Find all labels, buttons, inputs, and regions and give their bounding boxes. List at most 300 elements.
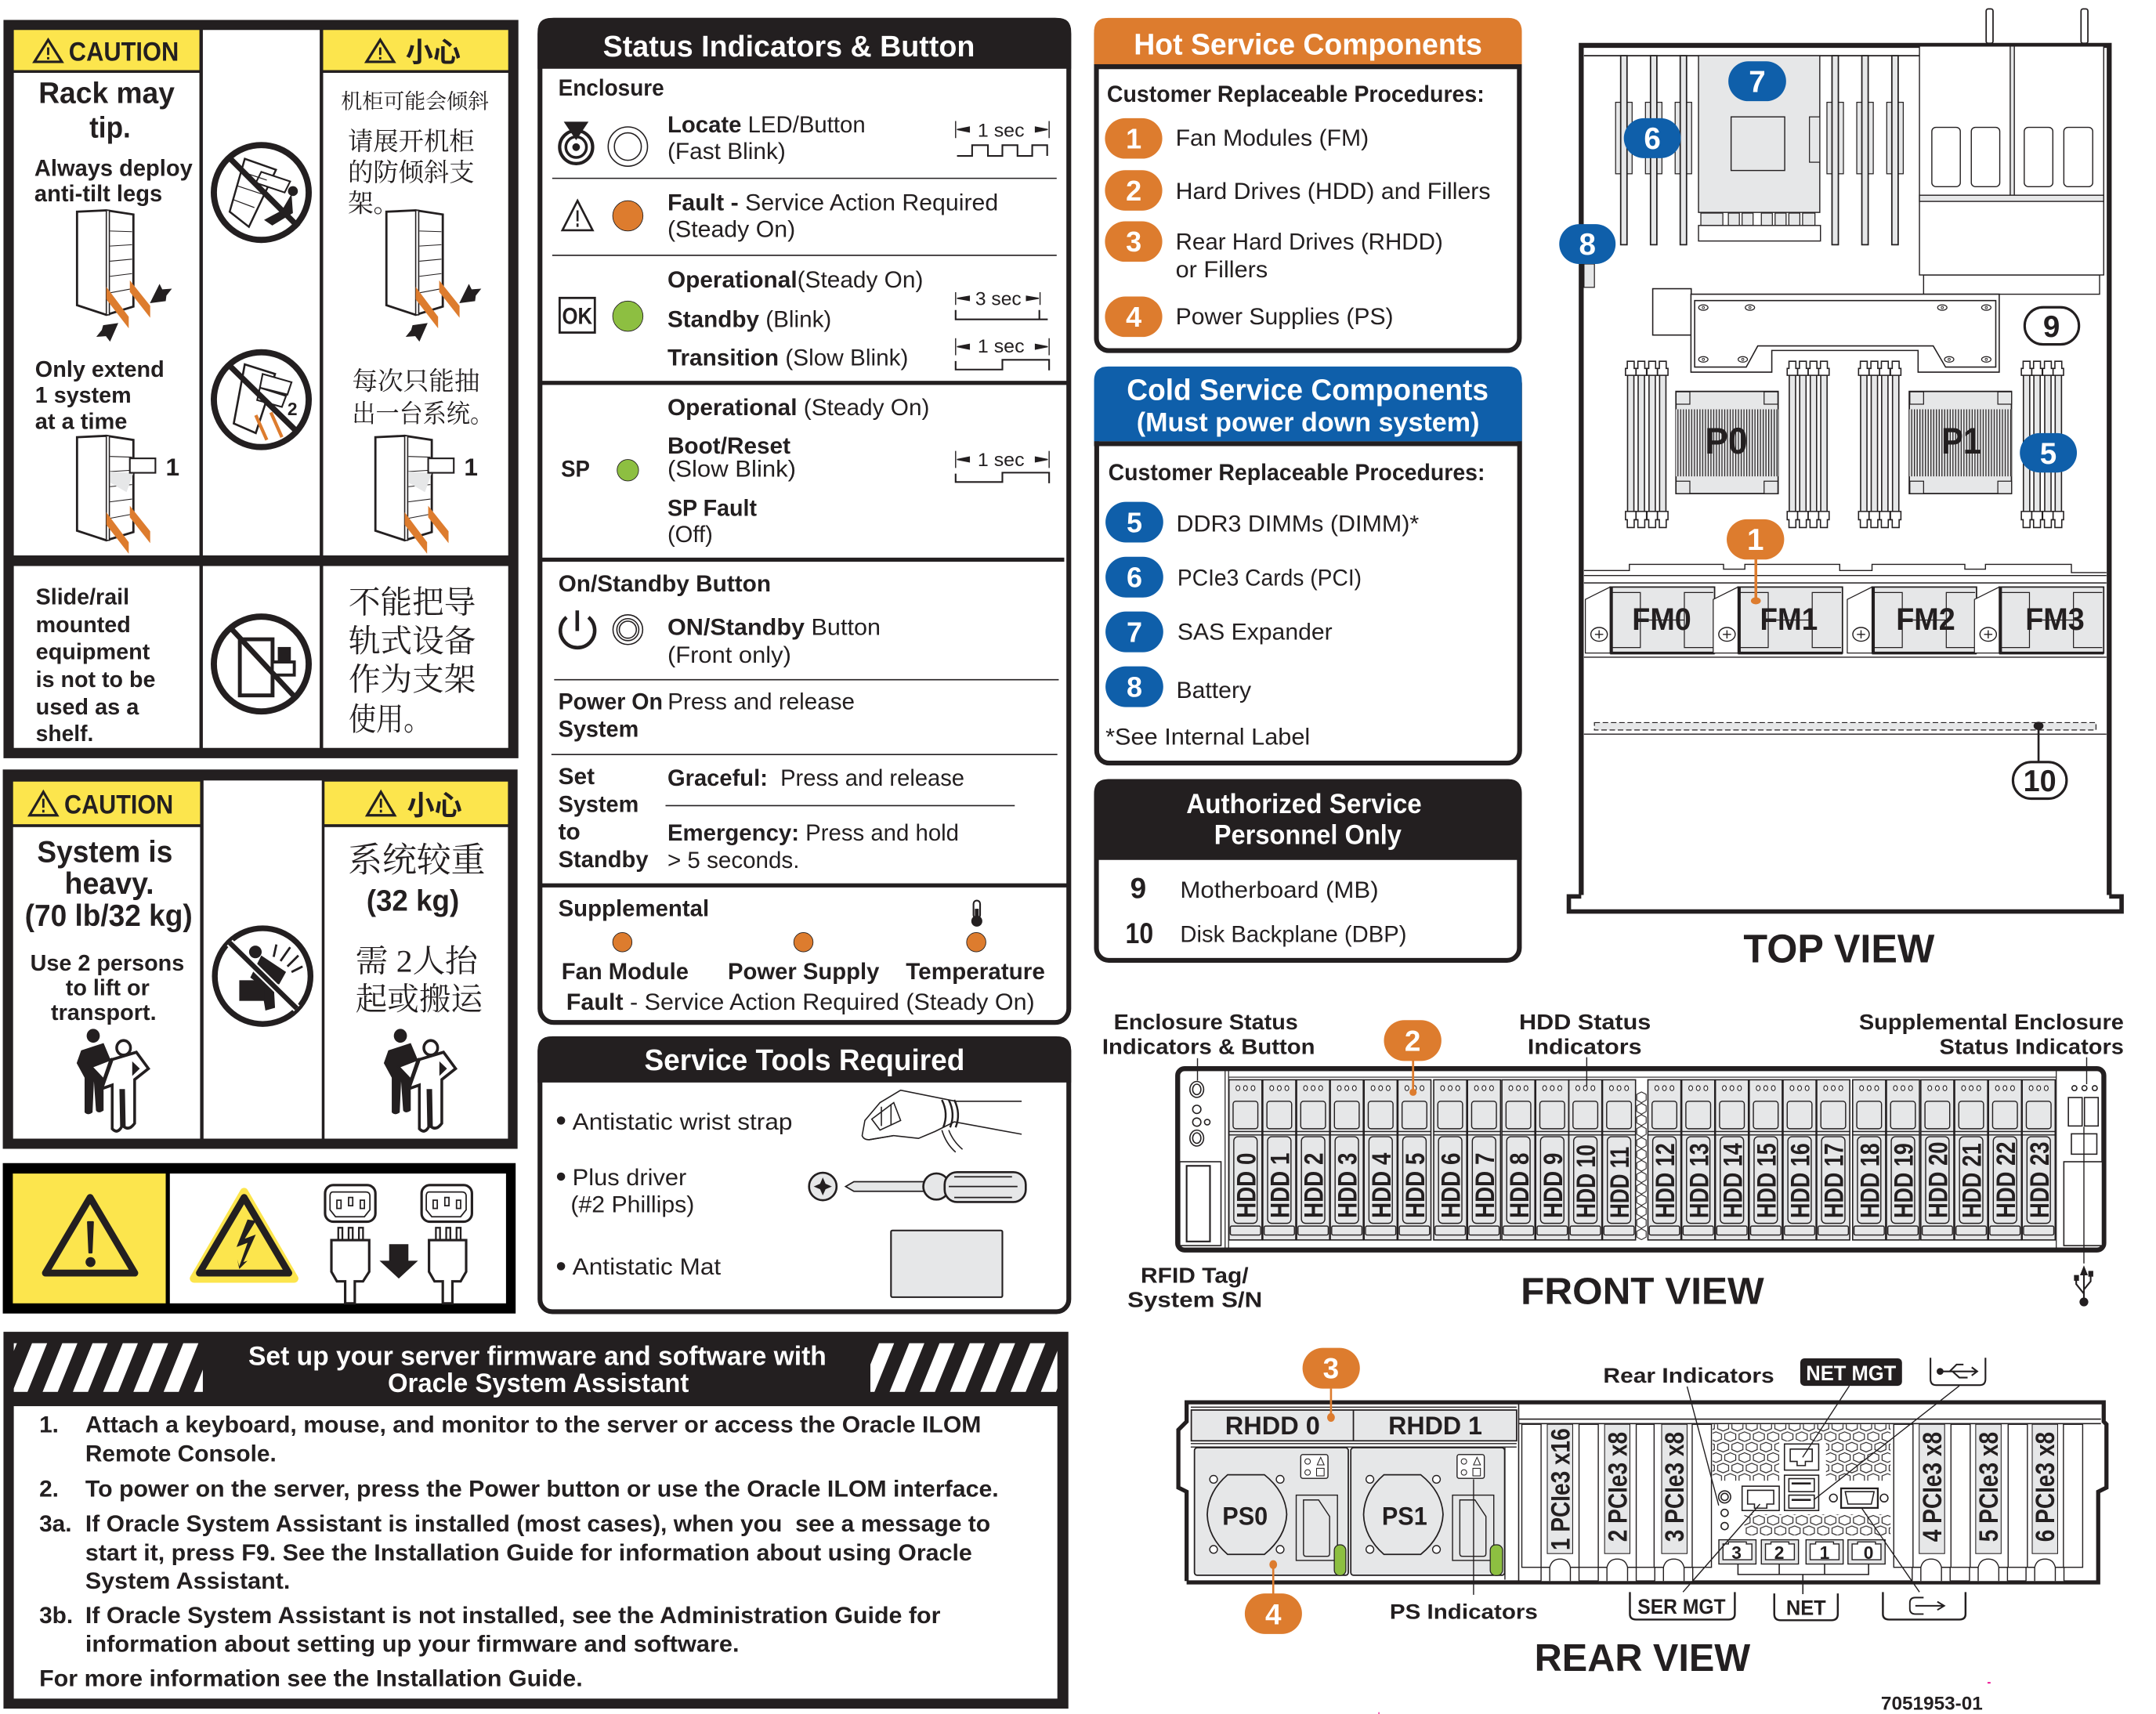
- text: system is heavy english: [25, 835, 193, 1025]
- net ports: 3: [1731, 1542, 1742, 1563]
- text: system is heavy english: System is: [37, 835, 172, 869]
- text: customer replaceable: Customer Replaceable Procedures:: [1107, 81, 1485, 107]
- icon: power sockets and plugs: [325, 1185, 472, 1304]
- heading: hot service: Hot Service Components: [1134, 27, 1482, 60]
- icon: rack with one extended system (chinese column): 1: [464, 453, 478, 481]
- heading: caution english: CAUTION: [64, 790, 173, 819]
- text: fault: Fault - Service Action Required: [667, 190, 998, 216]
- pcie slots: [1522, 1424, 2082, 1581]
- callout 1: [1727, 519, 1784, 605]
- badge: net mgt: NET MGT: [1806, 1361, 1897, 1385]
- text: system is heavy english: heavy.: [65, 867, 154, 901]
- icon: plus driver: [845, 1172, 1026, 1202]
- text: rack may tip chinese: 的防倾斜支: [348, 158, 475, 187]
- icon: no extending two systems: 2: [288, 399, 298, 419]
- icon: general warning triangle: [45, 1198, 135, 1273]
- item: pcie cards: PCIe3 Cards (PCI): [1177, 565, 1362, 591]
- text: system is heavy chinese: 需 2人抬: [356, 943, 479, 978]
- text: locate: (Fast Blink): [667, 139, 786, 165]
- heading: caution chinese: [367, 38, 461, 68]
- text: on standby button: [667, 614, 881, 668]
- callout 8: 8: [1579, 228, 1596, 262]
- panel: hot service components: [1094, 18, 1522, 351]
- left ear controls: [1180, 1082, 1221, 1246]
- text: rack may tip english: Only extend: [35, 357, 165, 382]
- panel: service tools required: [537, 1036, 1071, 1311]
- hdd labels: HDD 10: [1572, 1144, 1601, 1218]
- heading: set up server: [248, 1342, 827, 1398]
- hdd labels: HDD 17: [1820, 1143, 1850, 1218]
- stripes right: [870, 1343, 1058, 1392]
- text: slide rail warning chinese: 轨式设备: [349, 624, 476, 659]
- item: disk backplane: [1126, 917, 1406, 949]
- text: power on system: System: [559, 717, 638, 743]
- disk backplane: [1594, 722, 2096, 730]
- chassis rear: [1178, 1402, 2107, 1582]
- item: battery: 8: [1127, 671, 1142, 703]
- item: fan modules: Fan Modules (FM): [1176, 125, 1369, 151]
- item: motherboard: [1130, 873, 1379, 905]
- callout 10: 10: [2024, 765, 2057, 798]
- text: sp states: [667, 395, 929, 548]
- fan modules: [1586, 587, 2104, 653]
- heading: cold service: [1127, 374, 1489, 438]
- text: set system to standby: > 5 seconds.: [667, 848, 799, 873]
- chart: three second blink timing: [956, 289, 1047, 320]
- heading: cold service: (Must power down system): [1137, 408, 1479, 438]
- item: fan modules: 1: [1126, 123, 1141, 155]
- text: slide rail warning chinese: 使用。: [349, 702, 431, 737]
- text: set system to standby: Graceful: Press and release: [667, 765, 964, 791]
- icon: two persons lifting (chinese column): [384, 1029, 456, 1131]
- power supplies top: [1919, 46, 2104, 295]
- text: setup steps: [39, 1412, 999, 1692]
- text: locate: [667, 112, 866, 165]
- icon: temperature led: [967, 932, 986, 952]
- icon: wrist strap: [862, 1090, 1022, 1152]
- text: slide rail warning english: is not to be: [36, 667, 155, 692]
- hdd labels: HDD 22: [1991, 1142, 2021, 1218]
- item: power supplies: [1105, 297, 1394, 337]
- icon: power supply led: [794, 932, 813, 952]
- hdd labels: HDD 14: [1718, 1143, 1748, 1218]
- text: rack may tip english: [34, 77, 193, 435]
- pcie slots: 5 PCIe3 x8: [1974, 1432, 2004, 1542]
- text: system is heavy chinese: 系统较重: [348, 842, 486, 880]
- text: rack may tip chinese: 每次只能抽: [352, 367, 480, 396]
- icon: rack with one extended system: 1: [166, 453, 179, 481]
- icon: ok box: OK: [563, 303, 593, 329]
- text: tools list: Antistatic Mat: [573, 1254, 722, 1280]
- pcie slots: 3 PCIe3 x8: [1660, 1432, 1690, 1542]
- heading: caution chinese: [367, 791, 462, 822]
- hdd labels: HDD 3: [1333, 1153, 1363, 1218]
- power supply 0: [1195, 1448, 1348, 1575]
- item: rear hard drives: [1105, 222, 1443, 283]
- io vents: [1713, 1424, 1890, 1535]
- heading: authorized: [1186, 789, 1422, 851]
- text: on standby button: ON/Standby Button: [667, 614, 881, 640]
- callout 1: 1: [1747, 523, 1764, 557]
- text: part number: 7051953-01: [1881, 1694, 1983, 1714]
- icon: no tipping rack: [214, 145, 309, 240]
- net ports: 0: [1864, 1542, 1873, 1563]
- text: slide rail warning english: equipment: [36, 640, 150, 665]
- item: motherboard: 9: [1130, 873, 1146, 905]
- text: supplemental labels: Fault - Service Action Required (Steady On): [566, 989, 1035, 1015]
- text: system is heavy chinese: (32 kg): [367, 884, 459, 917]
- callout 2: 2: [1405, 1025, 1420, 1058]
- item: pcie cards: 6: [1127, 562, 1142, 594]
- icon: sp led: [617, 460, 638, 481]
- chart: three second blink timing: 3 sec: [975, 289, 1022, 309]
- dimm slots: [1626, 361, 2064, 527]
- text: slide rail warning english: mounted: [36, 613, 131, 638]
- cpu p0: P0: [1705, 421, 1748, 462]
- hdd labels: HDD 4: [1367, 1153, 1397, 1218]
- text: tools list: Antistatic wrist strap: [573, 1109, 792, 1135]
- item: rear hard drives: Rear Hard Drives (RHDD): [1176, 230, 1443, 255]
- text: rack may tip english: tip.: [89, 111, 131, 144]
- badge: ser mgt: SER MGT: [1637, 1594, 1726, 1618]
- net ports: [1719, 1540, 1885, 1594]
- text: supplemental labels: [562, 959, 1045, 1015]
- heading: set up server: Set up your server firmware and software with: [248, 1342, 827, 1372]
- item: power supplies: Power Supplies (PS): [1176, 304, 1394, 330]
- stripes left: [14, 1343, 203, 1392]
- text: slide rail warning english: shelf.: [36, 721, 93, 747]
- panel: electrical warning: [3, 1163, 515, 1314]
- heading: authorized: Personnel Only: [1214, 820, 1402, 851]
- labels: front view callouts: System S/N: [1127, 1288, 1262, 1312]
- text: system is heavy chinese: 起或搬运: [356, 982, 483, 1017]
- text: operational standby transition: Operational(Steady On): [667, 267, 923, 293]
- panel: authorized service personnel: [1094, 779, 1522, 960]
- callout 6: [1624, 118, 1680, 158]
- text: power on system: Press and release: [667, 689, 855, 715]
- panel: cold service components: [1094, 367, 1522, 763]
- icon: phillips screw: [809, 1173, 837, 1200]
- chart: one second fast blink timing: [956, 121, 1049, 156]
- callout 5: [2020, 433, 2077, 472]
- text: supplemental labels: Fan Module: [562, 959, 689, 985]
- panel: status indicators and button: [537, 18, 1071, 1022]
- pcie slots: 2 PCIe3 x8: [1603, 1432, 1633, 1542]
- fan modules: FM2: [1896, 602, 1955, 637]
- text: sp states: (Off): [667, 522, 713, 548]
- text: rack may tip chinese: 请展开机柜: [348, 127, 475, 156]
- net ports: 1: [1820, 1542, 1830, 1563]
- text: slide rail warning english: Slide/rail: [36, 585, 129, 610]
- cpu p1: [1909, 392, 2012, 494]
- diagram: front view: [1102, 1010, 2124, 1312]
- panel: set up firmware: [3, 1332, 1069, 1709]
- text: sp states: SP Fault: [667, 496, 757, 522]
- icon: thermometer: [971, 901, 982, 927]
- text: set system to standby: System: [559, 792, 638, 818]
- hdd labels: HDD 20: [1924, 1142, 1954, 1218]
- item: pcie cards: [1105, 557, 1362, 598]
- rhdd bays: RHDD 1: [1388, 1412, 1482, 1440]
- hdd labels: HDD 7: [1470, 1153, 1500, 1218]
- center vent: [1637, 1091, 1647, 1240]
- icon: high voltage triangle: [194, 1192, 295, 1278]
- heading: caution chinese: 小心: [406, 38, 461, 68]
- text: set system to standby: Standby: [559, 847, 649, 873]
- hdd labels: HDD 9: [1539, 1153, 1568, 1218]
- text: setup steps: If Oracle System Assistant is not installed, see the Administration Guide for: [85, 1603, 941, 1629]
- chassis front: [1177, 1069, 2104, 1250]
- item: sas expander: [1105, 612, 1333, 653]
- callout 9: 9: [2043, 310, 2060, 344]
- icon: fault led: [613, 201, 643, 231]
- icon: no single person lift: [215, 928, 310, 1024]
- text: operational standby transition: Transition (Slow Blink): [667, 345, 908, 371]
- hdd labels: HDD 11: [1605, 1147, 1635, 1218]
- hdd labels: HDD 23: [2025, 1142, 2055, 1218]
- item: hard drives: Hard Drives (HDD) and Fillers: [1176, 179, 1491, 204]
- icon: no extending two systems: [214, 353, 309, 447]
- text: rack may tip chinese: 出一台系统。: [352, 400, 494, 428]
- text: setup steps: start it, press F9. See the Installation Guide for information about using Oracle: [85, 1540, 972, 1566]
- text: fault: [667, 190, 998, 243]
- item: hard drives: [1105, 170, 1491, 211]
- icon: two persons lifting: [77, 1029, 148, 1131]
- text: setup steps: For more information see the Installation Guide.: [39, 1666, 583, 1692]
- heading: cold service: Cold Service Components: [1127, 374, 1489, 407]
- callout 9: [2024, 307, 2079, 345]
- cpu p0: [1676, 392, 1778, 494]
- text: setup steps: System Assistant.: [85, 1568, 290, 1594]
- text: fault: (Steady On): [667, 217, 795, 243]
- text: system is heavy chinese: [348, 842, 486, 1017]
- text: operational standby transition: Standby (Blink): [667, 307, 831, 333]
- item: sas expander: SAS Expander: [1177, 620, 1333, 645]
- labels: front view callouts: Enclosure Status: [1114, 1010, 1298, 1034]
- hdd labels: HDD 0: [1232, 1153, 1261, 1218]
- item: fan modules: [1105, 118, 1369, 159]
- text: supplemental labels: Power Supply: [728, 959, 880, 985]
- cpu p1: P1: [1941, 421, 1981, 462]
- hdd labels: HDD 1: [1266, 1153, 1296, 1218]
- badge: usb: [1930, 1358, 1985, 1385]
- text: power on system: Power On: [559, 689, 663, 715]
- callout 3: [1303, 1348, 1360, 1422]
- icon: usb: [2075, 1267, 2093, 1306]
- title: rear view: REAR VIEW: [1535, 1637, 1751, 1680]
- leader lines: [1474, 1386, 1959, 1595]
- hdd labels: HDD 16: [1786, 1143, 1816, 1218]
- text: rack may tip english: Rack may: [38, 77, 175, 110]
- text: customer replaceable: Customer Replaceable Procedures:: [1109, 460, 1485, 486]
- text: setup steps: 3a.: [39, 1511, 72, 1537]
- chart: sp slow blink timing: 1 sec: [978, 450, 1025, 471]
- labels: front view callouts: RFID Tag/: [1141, 1263, 1249, 1287]
- callout 7: [1728, 61, 1786, 101]
- hdd labels: HDD 19: [1890, 1143, 1919, 1218]
- labels: front view callouts: Supplemental Enclosure: [1859, 1010, 2124, 1034]
- right ear controls: [2064, 1086, 2102, 1246]
- callout 4: 4: [1265, 1599, 1282, 1631]
- hdd labels: HDD 6: [1437, 1153, 1467, 1218]
- labels: front view callouts: Indicators: [1528, 1034, 1642, 1058]
- io ports: [1719, 1444, 1888, 1530]
- title: front view: FRONT VIEW: [1521, 1270, 1764, 1312]
- hdd labels: HDD 8: [1505, 1153, 1535, 1218]
- labels: front view callouts: Indicators & Button: [1102, 1034, 1315, 1058]
- text: set system to standby: to: [559, 819, 581, 844]
- power supply 1: [1351, 1448, 1505, 1575]
- text: system is heavy english: to lift or: [66, 976, 150, 1001]
- motherboard stiffener: [1653, 289, 1999, 372]
- text: set system to standby: Set: [559, 764, 595, 790]
- text: power on system: [559, 689, 855, 743]
- labels: front view callouts: [1102, 1010, 2124, 1312]
- item: rear hard drives: 3: [1126, 226, 1141, 258]
- icon: not a shelf: [214, 617, 309, 711]
- callout 7: 7: [1749, 66, 1766, 99]
- hdd labels: HDD 21: [1958, 1143, 1988, 1218]
- text: tools list: Plus driver: [573, 1165, 686, 1191]
- chart: one second fast blink timing: 1 sec: [978, 121, 1025, 142]
- text: enclosure section label: Enclosure: [559, 75, 664, 101]
- text: rack may tip english: at a time: [35, 410, 127, 435]
- badge: net: [1774, 1593, 1838, 1620]
- text: slide rail warning english: [36, 585, 155, 747]
- text: rack may tip english: Always deploy: [34, 156, 193, 182]
- text: rack may tip chinese: 机柜可能会倾斜: [341, 90, 489, 114]
- text: set system to standby: [559, 764, 964, 873]
- callout 3: 3: [1323, 1352, 1339, 1384]
- icon: antistatic mat: [891, 1231, 1002, 1297]
- hdd labels: HDD 2: [1300, 1153, 1329, 1218]
- chart: one second slow blink timing: [956, 337, 1049, 371]
- fan modules: FM1: [1760, 602, 1818, 637]
- hdd labels: HDD 15: [1753, 1143, 1782, 1218]
- item: sas expander: 7: [1127, 617, 1142, 649]
- text: setup steps: 1.: [39, 1412, 59, 1438]
- icon: rack with anti-tilt legs (chinese column): [386, 211, 481, 342]
- item: dimms: DDR3 DIMMs (DIMM)*: [1176, 511, 1420, 537]
- text: on standby heading: On/Standby Button: [559, 571, 771, 597]
- icon: locate button ring: [608, 127, 647, 166]
- text: operational standby transition: [667, 267, 923, 371]
- leader lines: [1198, 1058, 2086, 1264]
- chart: sp slow blink timing: [956, 450, 1049, 483]
- text: setup steps: If Oracle System Assistant is installed (most cases), when you see a message to: [85, 1511, 990, 1537]
- hdd labels: HDD 18: [1855, 1143, 1885, 1218]
- power supply 1: PS1: [1382, 1502, 1427, 1530]
- heading: status indicators: Status Indicators & Button: [603, 30, 975, 63]
- icon: fan module led: [613, 932, 632, 952]
- labels: front view callouts: HDD Status: [1519, 1010, 1651, 1034]
- heading: caution english: [30, 790, 173, 819]
- hdd labels: HDD 5: [1401, 1153, 1431, 1218]
- labels: front view callouts: Status Indicators: [1940, 1034, 2124, 1058]
- text: slide rail warning english: used as a: [36, 695, 139, 720]
- item: dimms: [1105, 502, 1420, 543]
- icon: ok led: [613, 301, 643, 331]
- item: battery: Battery: [1176, 678, 1251, 703]
- text: sp states: Boot/Reset: [667, 433, 790, 459]
- text: slide rail warning chinese: 作为支架: [349, 662, 476, 697]
- labels: rear indicators: Rear Indicators: [1603, 1363, 1774, 1387]
- text: rack may tip chinese: 架。: [348, 189, 399, 218]
- text: slide rail warning chinese: 不能把导: [349, 585, 476, 620]
- text: setup steps: 2.: [39, 1476, 59, 1502]
- rhdd bays: RHDD 0: [1225, 1412, 1320, 1440]
- text: sp states: (Slow Blink): [667, 456, 796, 482]
- callout 5: 5: [2040, 437, 2057, 471]
- text: see internal label: *See Internal Label: [1105, 724, 1310, 750]
- callout 8: [1559, 224, 1615, 264]
- fan modules: FM3: [2025, 602, 2085, 637]
- icon: rack with one extended system: [77, 436, 179, 554]
- text: tools list: [557, 1109, 792, 1280]
- item: dimms: 5: [1127, 507, 1142, 539]
- text: sp states: Operational (Steady On): [667, 395, 929, 421]
- item: battery: [1105, 667, 1251, 707]
- item: disk backplane: 10: [1126, 917, 1153, 949]
- text: tools list: (#2 Phillips): [570, 1191, 694, 1217]
- callout 10: [2013, 721, 2067, 798]
- net ports: 2: [1774, 1542, 1784, 1563]
- pcie slots: 4 PCIe3 x8: [1918, 1432, 1948, 1542]
- item: disk backplane: Disk Backplane (DBP): [1180, 922, 1406, 948]
- text: setup steps: To power on the server, press the Power button or use the Oracle ILOM interface.: [85, 1476, 999, 1502]
- text: slide rail warning chinese: [349, 585, 476, 737]
- icon: fault triangle: [563, 201, 592, 230]
- item: power supplies: 4: [1126, 301, 1141, 333]
- icon: rack with one extended system (chinese column): [375, 436, 478, 554]
- panel: rack tip caution: [3, 20, 519, 758]
- hdd labels: HDD 12: [1651, 1143, 1680, 1218]
- item: rear hard drives: or Fillers: [1176, 257, 1268, 283]
- icon: ok box: [559, 298, 595, 333]
- hdd labels: HDD 13: [1684, 1143, 1714, 1218]
- badge: net: NET: [1786, 1596, 1826, 1620]
- hdd labels: [1232, 1142, 2055, 1218]
- text: set system to standby: Emergency: Press and hold: [667, 820, 959, 846]
- text: locate: Locate LED/Button: [667, 112, 866, 138]
- pcie cards: [1615, 56, 1903, 244]
- power supply 0: PS0: [1222, 1502, 1268, 1530]
- title: top view: TOP VIEW: [1743, 927, 1934, 971]
- icon: locate: [559, 121, 592, 164]
- text: sp label: SP: [561, 456, 590, 482]
- heading: caution chinese: 小心: [407, 791, 462, 822]
- icon: power button ring: [613, 615, 642, 645]
- battery: [1584, 264, 1594, 287]
- diagram: top view: [1559, 9, 2122, 971]
- callout 6: 6: [1644, 122, 1661, 156]
- hdd bays: [1229, 1079, 2055, 1240]
- callout 4: [1245, 1560, 1302, 1634]
- badge: serial port: [1883, 1592, 1966, 1619]
- panel: heavy system caution: [3, 769, 518, 1149]
- fan modules: FM0: [1632, 602, 1691, 637]
- text: system is heavy english: transport.: [51, 1000, 157, 1025]
- icon: rack with anti-tilt legs: [77, 211, 172, 342]
- text: rack may tip english: anti-tilt legs: [34, 181, 162, 207]
- chart: one second slow blink timing: 1 sec: [978, 337, 1025, 357]
- text: system is heavy english: Use 2 persons: [31, 951, 184, 976]
- heading: set up server: Oracle System Assistant: [388, 1369, 689, 1398]
- label: ps indicators: PS Indicators: [1390, 1600, 1538, 1624]
- rhdd bays: [1192, 1410, 1517, 1441]
- text: system is heavy english: (70 lb/32 kg): [25, 899, 193, 933]
- text: setup steps: Remote Console.: [85, 1441, 277, 1467]
